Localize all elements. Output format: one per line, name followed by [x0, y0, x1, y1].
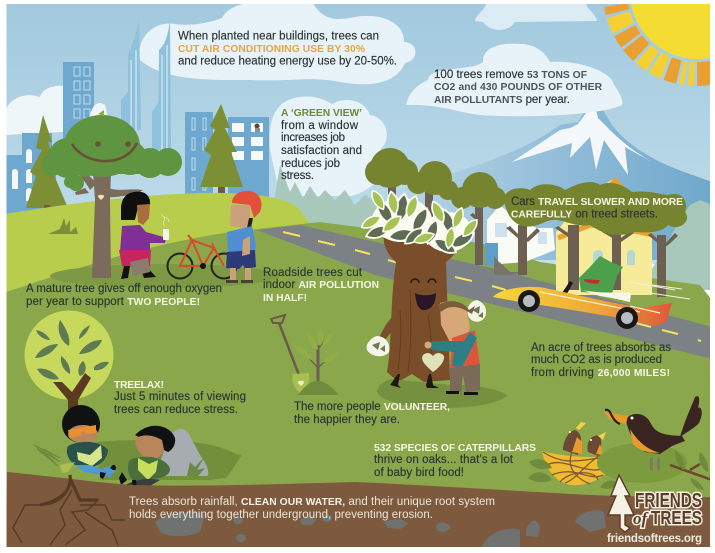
friendly smiling tree — [41, 110, 182, 278]
text: slower cars: Cars TRAVEL SLOWER AND MORE — [511, 196, 683, 208]
text: caterpillars — [374, 443, 536, 479]
text: volunteer — [294, 401, 450, 426]
text: green view: satisfaction and — [281, 145, 362, 157]
ground shadow — [377, 379, 507, 408]
parent bird with caterpillar — [597, 396, 712, 490]
rock — [155, 429, 208, 476]
text: treelax: TREELAX! — [114, 380, 164, 391]
text: clean water — [129, 496, 495, 521]
car with driver — [493, 256, 690, 329]
tree roots — [13, 475, 125, 545]
text: green view: from a window — [281, 120, 359, 132]
building: office with window person — [228, 117, 269, 197]
volunteer hugging tree — [422, 301, 480, 395]
text: clean water: Trees absorb rainfall, CLEAN OUR WATER, and their unique root system — [129, 496, 495, 508]
text: 100 trees: CO2 and 430 POUNDS OF OTHER — [434, 82, 603, 93]
large hugging oak tree — [359, 188, 486, 382]
text: green view — [281, 108, 362, 182]
background shrubs — [95, 440, 243, 480]
grass tuft: right — [494, 256, 518, 275]
building: centre — [185, 112, 213, 202]
cloud: small behind building — [90, 103, 108, 117]
child reading in green — [119, 426, 175, 492]
building: left tall — [63, 62, 94, 139]
tree with round crown — [24, 310, 114, 420]
towers — [121, 20, 171, 150]
conifer: centre — [200, 104, 243, 198]
text: clean water: holds everything together underground, preventing erosion. — [129, 509, 433, 521]
road — [257, 225, 712, 359]
sky background — [6, 4, 710, 264]
text: volunteer: The more people VOLUNTEER, — [294, 401, 450, 413]
shadow under people — [50, 264, 280, 288]
text: treelax — [114, 380, 246, 416]
oak leaves — [359, 188, 480, 257]
text: 100 trees: AIR POLLUTANTS per year. — [434, 94, 570, 106]
text: acre of trees: An acre of trees absorbs as — [531, 342, 671, 354]
building: left low — [6, 133, 56, 214]
green field — [6, 222, 710, 508]
logo: Friends of Trees: TREES — [651, 508, 702, 528]
text: roadside trees — [263, 267, 379, 304]
text: treelax: Just 5 minutes of viewing — [114, 391, 246, 403]
text: acre of trees — [531, 342, 671, 379]
cloud: air conditioning — [139, 2, 415, 84]
sapling — [295, 327, 340, 395]
text: roadside trees: IN HALF! — [263, 293, 307, 304]
text: green view: reduces job — [281, 158, 340, 170]
text: acre of trees: from driving 26,000 MILES! — [531, 367, 670, 379]
text: mature tree oxygen: per year to support TWO PEOPLE! — [26, 296, 200, 308]
child reading with glasses — [60, 405, 116, 479]
cloud: left small — [6, 86, 63, 135]
text: mature tree oxygen: A mature tree gives off enough oxygen — [26, 283, 222, 295]
text: air conditioning: CUT AIR CONDITIONING USE BY 30% — [178, 44, 365, 55]
text: website: friendsoftrees.org — [607, 533, 702, 545]
logo: Friends of Trees — [608, 475, 702, 532]
soil — [6, 472, 712, 547]
nest with chicks — [528, 422, 620, 489]
pale distant tree line — [272, 165, 712, 290]
cloud: green view — [270, 97, 387, 196]
cloud: top small — [475, 4, 597, 30]
lime hill — [6, 193, 316, 300]
text: caterpillars: 532 SPECIES OF CATERPILLARS — [374, 443, 536, 454]
yellow house — [556, 177, 652, 295]
white house — [485, 205, 555, 265]
boots — [390, 374, 439, 388]
sun — [615, 0, 715, 74]
stones in soil — [155, 510, 606, 547]
bicycle — [168, 235, 236, 278]
text: 100 trees — [434, 69, 603, 106]
grass tuft — [48, 218, 78, 234]
text: roadside trees: Roadside trees cut — [263, 267, 363, 279]
text: caterpillars: thrive on oaks... that’s a lot — [374, 454, 514, 466]
text: 100 trees: 100 trees remove 53 TONS OF — [434, 69, 587, 81]
text: green view: increases job — [281, 132, 345, 144]
text: acre of trees: much CO2 as is produced — [531, 354, 662, 366]
text: treelax: trees can reduce stress. — [114, 404, 238, 416]
text: roadside trees: indoor AIR POLLUTION — [263, 279, 379, 291]
text: green view: A ‘GREEN VIEW’ — [281, 108, 362, 119]
text: volunteer: the happier they are. — [294, 414, 400, 426]
text: caterpillars: of baby bird food! — [374, 467, 464, 479]
text: air conditioning — [178, 30, 397, 68]
grass tufts: near children — [34, 445, 205, 476]
logo: Friends of Trees: of — [633, 509, 650, 528]
conifer: left — [26, 115, 67, 208]
text: slower cars: CAREFULLY on treed streets. — [511, 208, 658, 220]
text: slower cars — [511, 196, 683, 220]
woman with coffee — [119, 192, 169, 279]
text: air conditioning: When planted near buildings, trees can — [178, 30, 379, 42]
man with helmet — [226, 191, 262, 283]
mountain — [418, 110, 710, 260]
text: mature tree oxygen — [26, 283, 222, 308]
shovel — [271, 315, 309, 393]
background trees — [365, 148, 687, 297]
small leaf clusters — [367, 300, 486, 356]
text: green view: stress. — [281, 170, 314, 182]
cloud: 100 trees — [406, 44, 622, 116]
text: air conditioning: and reduce heating energy use by 20-50%. — [178, 56, 397, 68]
